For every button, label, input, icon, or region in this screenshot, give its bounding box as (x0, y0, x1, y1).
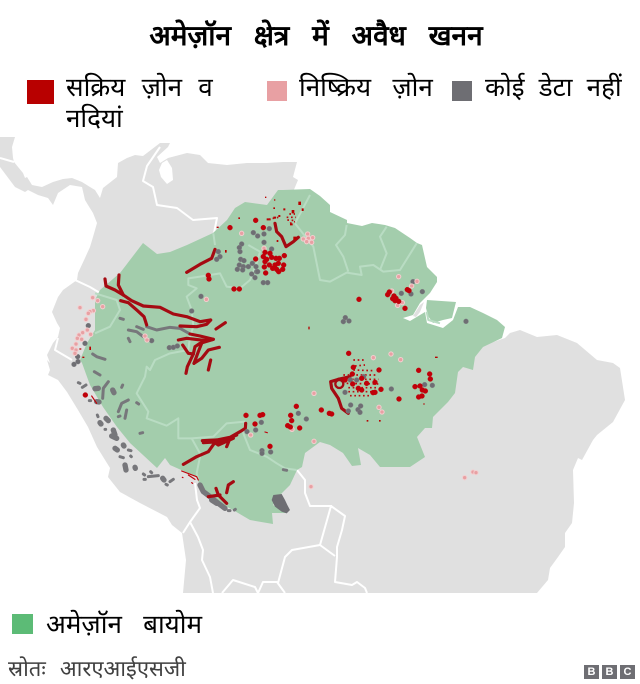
red mining specks (79, 197, 438, 422)
legend (27, 72, 622, 133)
national borders on grey land (0, 147, 367, 593)
grey land (0, 137, 625, 593)
source: स्रोतः आरएआईएसजी (8, 656, 186, 681)
map (0, 137, 625, 593)
thin red lines (92, 396, 267, 483)
legend swatch: Amazon biome (12, 614, 33, 634)
legend label: inactive: निष्क्रिय ज़ोन (299, 72, 433, 102)
BBC logo: B (588, 666, 595, 678)
legend label: active (66, 72, 214, 133)
BBC logo (584, 665, 635, 679)
Amazon biome area (80, 189, 505, 524)
legend label: active: सक्रिय ज़ोन व (66, 72, 213, 102)
grey plateau blob (272, 494, 290, 513)
internal borders in biome (95, 195, 440, 480)
legend swatch: active (27, 80, 54, 104)
inactive sites (70, 231, 478, 489)
ring in river (335, 380, 343, 388)
legend label: active: नदियां (66, 103, 123, 133)
legend label: Amazon biome: अमेज़ॉन बायोम (46, 609, 202, 639)
dense speck clusters (268, 214, 378, 396)
BBC logo: C (624, 666, 631, 678)
small island in river mouth (413, 302, 424, 317)
no-data sites (71, 226, 468, 456)
title: अमेज़ॉन क्षेत्र में अवैध खनन (149, 20, 483, 51)
grey no-data river lines and blobs (78, 318, 290, 513)
Marajo island (426, 300, 456, 323)
active sites (83, 218, 433, 449)
BBC logo: B (606, 666, 613, 678)
lake Maracaibo (159, 160, 173, 184)
legend label: no data: कोई डेटा नहीं (485, 72, 622, 102)
red river lines (105, 223, 350, 503)
legend swatch: inactive (267, 81, 287, 101)
legend swatch: no data (452, 81, 472, 101)
